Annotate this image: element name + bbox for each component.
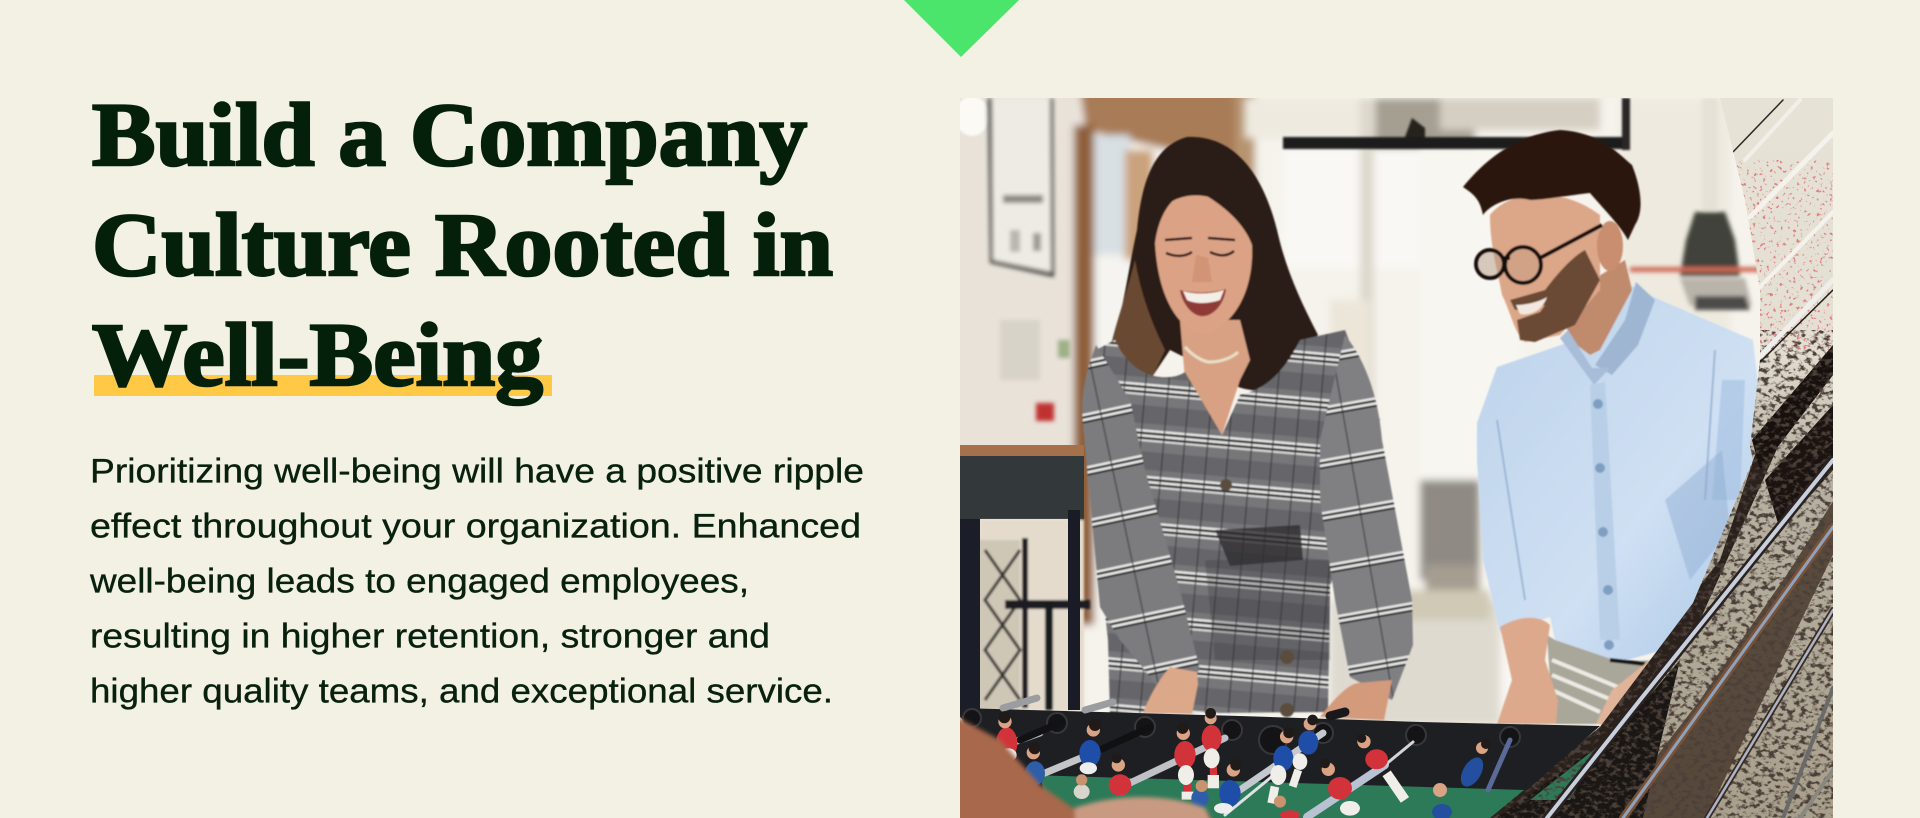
man: trousers: [1547, 635, 1655, 724]
figure blue 5: [1270, 727, 1295, 803]
figure red 3: [1174, 723, 1196, 800]
woman: dress buttons: [1220, 479, 1294, 717]
table: rods: [997, 722, 1510, 817]
woman: left hand: [1143, 667, 1198, 714]
title line 3: Well-Being: [92, 306, 543, 405]
hanging lamp: [1630, 98, 1760, 310]
ripple: diagonal highlight lines: [1547, 100, 1833, 818]
woman: necklace: [1185, 347, 1238, 362]
woman: dress bodice and skirt: [1090, 330, 1380, 714]
title line 2: Culture Rooted in: [92, 196, 833, 295]
man: sleeve shadow: [1712, 380, 1745, 500]
man: face: [1490, 194, 1600, 342]
table: rod mounts: [963, 709, 1520, 754]
table: far-right blue figure: [1432, 739, 1491, 818]
figure red 2: [1109, 753, 1131, 796]
man: neck: [1560, 260, 1632, 355]
figure red 1: [996, 711, 1017, 762]
woman: belt and waist shadow: [1215, 525, 1303, 566]
ripple: black bands: [1752, 345, 1833, 470]
woman: smile: [1180, 289, 1226, 316]
man: glasses: [1476, 225, 1602, 283]
ripple: red speckle noise: [1730, 160, 1835, 350]
side table and lattice: [960, 445, 1090, 710]
figure red 5: [1357, 734, 1405, 800]
woman: nose shadow: [1192, 255, 1212, 282]
ripple: dark speckle noise: [1480, 330, 1840, 818]
figure red 6: [1320, 758, 1360, 816]
man: sleeve seam: [1497, 350, 1715, 600]
figure white-kit: [1074, 774, 1090, 799]
ripple: dark lower left band: [1440, 420, 1790, 818]
decorative green triangle pointer: [904, 0, 1019, 57]
woman: back hair: [1110, 137, 1318, 392]
table: dark side wall: [960, 708, 1600, 790]
table: player figures: [996, 708, 1405, 818]
body paragraph: higher quality teams, and exceptional service.: [90, 672, 833, 710]
woman: right sleeve: [1320, 335, 1413, 700]
title line 1: Build a Company: [92, 86, 807, 185]
wall lamp globe: [960, 98, 988, 136]
blurred office background: [960, 98, 1602, 724]
title: [92, 86, 833, 405]
figure red 4: [1202, 708, 1222, 788]
man: mouth: [1516, 297, 1547, 314]
woman: lighter hair tips: [1110, 260, 1165, 385]
body paragraph: Prioritizing well-being will have a positive ripple: [90, 452, 864, 490]
man: [1463, 130, 1762, 726]
man: shirt: [1477, 285, 1762, 662]
body paragraph: effect throughout your organization. Enhanced: [90, 508, 861, 546]
table: playing field: [1030, 765, 1530, 818]
body paragraph: resulting in higher retention, stronger and: [90, 618, 770, 656]
woman: left sleeve: [1082, 345, 1200, 695]
foosball table: [960, 698, 1600, 818]
table: rod handles: [1003, 698, 1113, 710]
ripple glitch effect on right edge: [1490, 98, 1833, 818]
man: hair: [1463, 130, 1641, 240]
ripple: base tone: [1480, 90, 1840, 818]
woman: eyes: [1165, 238, 1235, 256]
man: forearm and hand: [1497, 618, 1558, 724]
body paragraph: [89, 452, 864, 710]
black ceiling beam: [1283, 98, 1630, 150]
woman: [1082, 137, 1413, 720]
woman: face: [1155, 190, 1252, 334]
figure red 7: [1274, 796, 1300, 818]
highlight bar under Well-Being: [94, 375, 552, 396]
foreground blurred arm: [955, 716, 1215, 818]
framed poster: [988, 98, 1070, 421]
man: ear: [1597, 221, 1623, 271]
man: shirt placket and buttons: [1590, 382, 1620, 640]
man: beard: [1510, 250, 1600, 342]
figure blue 4: [1191, 780, 1209, 808]
figure blue 2: [1079, 719, 1101, 774]
photo: colleagues playing foosball: [950, 90, 1850, 818]
figure blue 1: [1025, 742, 1045, 785]
body paragraph: well-being leads to engaged employees,: [89, 562, 749, 600]
figure blue 6: [1293, 715, 1318, 787]
figure blue 3: [1214, 759, 1242, 814]
woman: right hand: [1320, 680, 1392, 720]
man: collar: [1595, 282, 1655, 375]
man: second hand: [1596, 658, 1652, 726]
woman: neck and chest: [1180, 320, 1250, 435]
